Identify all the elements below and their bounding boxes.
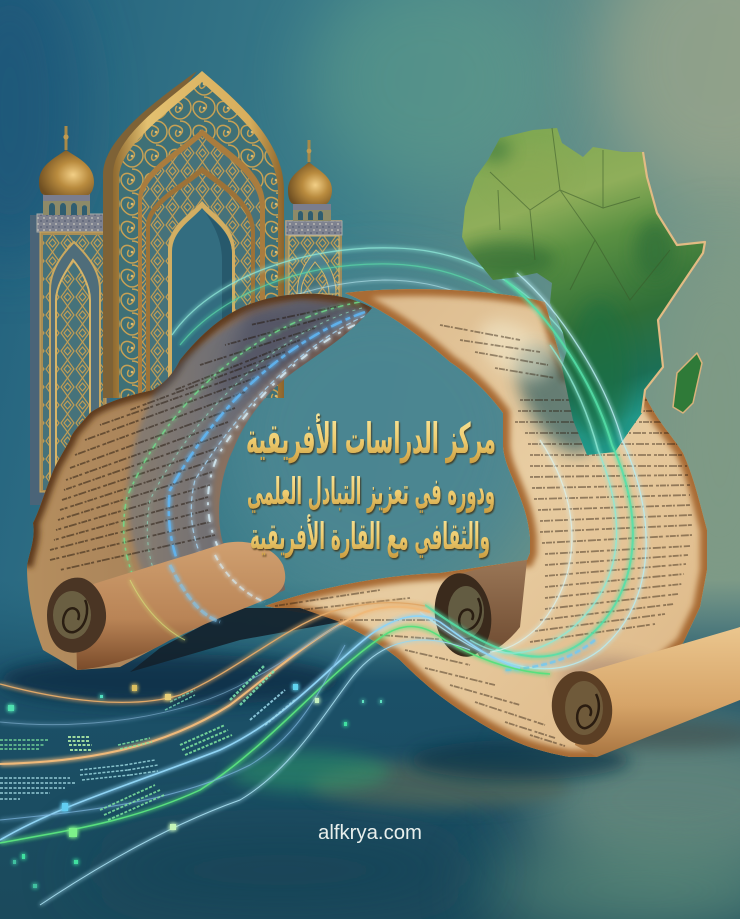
map of Africa: [455, 128, 705, 455]
left parchment sheet: [27, 294, 372, 670]
title: [246, 413, 496, 558]
right parchment shading: [265, 289, 707, 757]
website address: alfkrya.com: [318, 822, 422, 844]
left parchment writing: [50, 306, 340, 570]
main arch: [103, 71, 284, 398]
left scroll roll: [47, 542, 285, 670]
left parchment shading: [27, 294, 372, 571]
right minaret: [285, 140, 342, 305]
stream glow lines: [0, 603, 550, 905]
light streams over right sheet and Africa: [420, 273, 646, 670]
bottom right scroll roll: [546, 627, 740, 757]
mosque architecture: [30, 71, 342, 505]
flowing data streams: [0, 603, 550, 905]
Africa east coast highlight: [642, 152, 705, 413]
digital streams on left sheet: [124, 302, 365, 640]
Madagascar: [673, 353, 702, 413]
left minaret: [30, 126, 110, 505]
right parchment writing: [275, 325, 692, 746]
middle scroll roll: [429, 560, 527, 660]
Africa terrain: [455, 138, 675, 440]
green code fragments: [0, 665, 295, 820]
shadow strip under left scroll: [130, 608, 340, 672]
stream crossing the roll: [130, 555, 265, 640]
glowing data nodes: [8, 684, 382, 888]
right parchment sheet: [265, 289, 707, 757]
top arc of light: [172, 248, 565, 350]
Africa mainland: [462, 128, 705, 455]
Africa country borders: [490, 128, 670, 300]
